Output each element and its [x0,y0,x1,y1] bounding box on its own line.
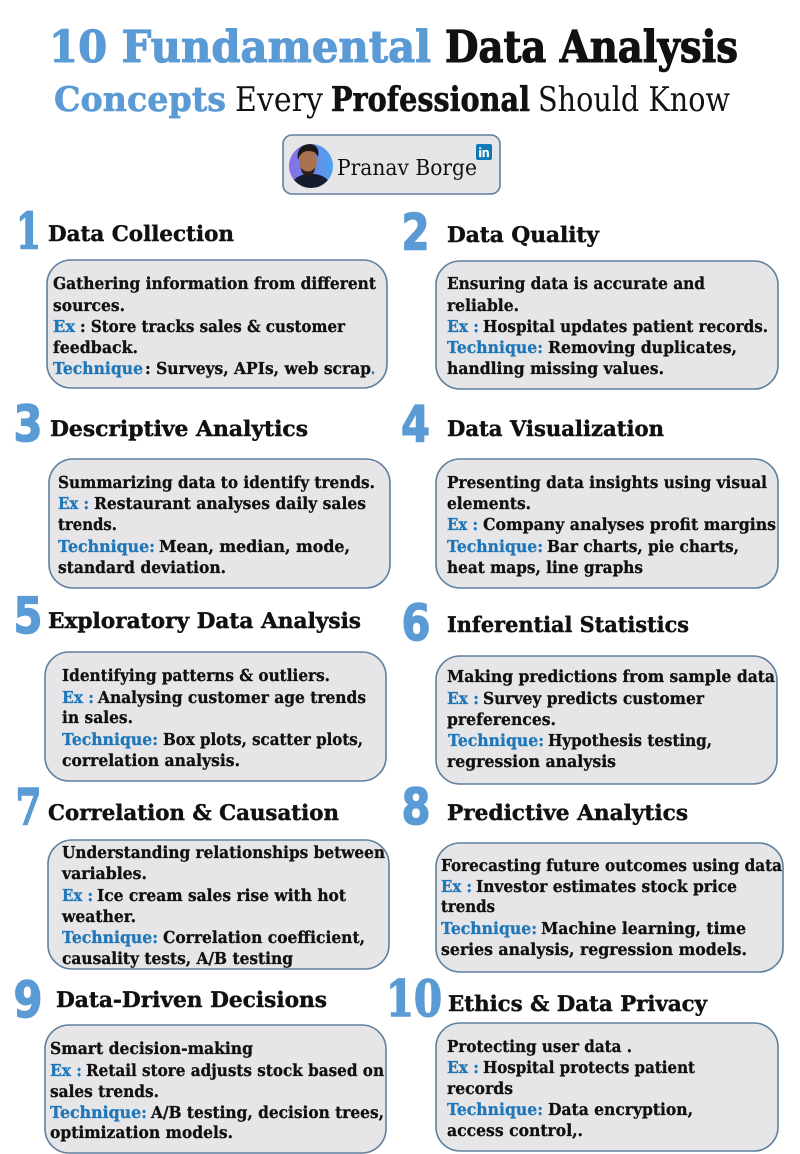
number 1: 1 [16,202,41,260]
icon: author avatar [289,144,333,190]
panel: Data Quality: Removing duplicates, [548,338,737,357]
panel: Ethics & Data Privacy: Hospital protects patient [483,1058,695,1077]
heading: Data Quality [447,223,599,248]
panel: Ethics & Data Privacy: Ex : [447,1058,479,1077]
panel: Data Collection: : Store tracks sales & customer [80,317,345,336]
panel: Data Visualization: Ex : [447,515,478,534]
panel: Predictive Analytics: Investor estimates stock price [476,877,737,896]
author name: Pranav Borge [337,156,477,181]
panel: Inferential Statistics: preferences. [447,710,556,729]
number 2: 2 [402,204,430,262]
heading: Data-Driven Decisions [56,988,327,1013]
panel: Predictive Analytics: Forecasting future outcomes using data [441,856,782,875]
panel: Correlation & Causation: Understanding relationships between [62,843,385,862]
panel: Descriptive Analytics: Ex : [58,494,89,513]
panel: Data-Driven Decisions: Smart decision-making [50,1039,253,1058]
panel: Data Collection [47,260,387,388]
panel: Data Visualization: Presenting data insights using visual [447,473,767,492]
section 8: Predictive Analytics [402,778,783,972]
panel: Data Collection: feedback. [53,338,138,357]
panel: Descriptive Analytics: Mean, median, mode, [159,537,350,556]
panel: Descriptive Analytics: Technique: [58,537,155,556]
panel: Predictive Analytics: series analysis, regression models. [441,940,747,959]
panel: Correlation & Causation [48,840,389,969]
panel: Ethics & Data Privacy: Protecting user data . [447,1037,632,1056]
panel: Correlation & Causation: Technique: [62,928,158,947]
panel: Data Quality: Ex : [447,317,479,336]
section 7: Correlation & Causation [16,778,389,969]
title: Data Analysis [445,22,738,73]
panel: Descriptive Analytics [49,459,390,588]
panel: Data-Driven Decisions: A/B testing, decision trees, [150,1103,384,1122]
panel: Correlation & Causation: causality tests, A/B testing [62,949,293,968]
panel: Exploratory Data Analysis: Technique: [62,730,158,749]
panel: Data Visualization: Bar charts, pie charts, [547,537,739,556]
panel: Descriptive Analytics: standard deviation. [58,558,226,577]
panel: Data-Driven Decisions: Ex : [50,1061,82,1080]
panel: Data Visualization: Technique: [447,537,543,556]
section 1: Data Collection [16,202,387,388]
panel: Correlation & Causation: weather. [61,907,136,926]
panel: Correlation & Causation: Ex : [62,886,93,905]
section 6: Inferential Statistics [402,594,777,784]
number 4: 4 [401,396,430,454]
panel: Data-Driven Decisions [45,1025,386,1153]
panel: Predictive Analytics: Ex : [441,877,472,896]
panel: Inferential Statistics: Making predictions from sample data [447,667,775,686]
title: 10 Fundamental [49,22,431,73]
number 9: 9 [14,971,42,1029]
heading: Descriptive Analytics [50,417,308,442]
number 3: 3 [14,395,42,453]
section 5: Exploratory Data Analysis [14,587,386,781]
heading: Data Collection [48,222,234,247]
heading: Exploratory Data Analysis [48,609,361,634]
panel: Ethics & Data Privacy: Technique: [447,1100,543,1119]
heading: Ethics & Data Privacy [448,992,707,1017]
panel: Data Visualization: Company analyses profit margins [483,515,776,534]
panel: Data Visualization [436,459,778,588]
panel: Data Visualization: elements. [447,494,531,513]
number 6: 6 [402,594,430,652]
panel: Data Collection: sources. [53,296,125,315]
panel: Data Collection: Ex [53,317,75,336]
panel: Predictive Analytics: Technique: [441,919,537,938]
panel: Inferential Statistics: Technique: [448,731,544,750]
panel: Exploratory Data Analysis: Ex : [62,688,94,707]
panel: Descriptive Analytics: Restaurant analyses daily sales [94,494,366,513]
panel: Data Quality: Ensuring data is accurate and [447,274,705,293]
panel: Data Quality: handling missing values. [447,359,664,378]
section 3: Descriptive Analytics [14,395,390,588]
panel: Exploratory Data Analysis: Identifying patterns & outliers. [62,666,330,685]
panel: Correlation & Causation: variables. [61,864,147,883]
icon: LinkedIn: in [478,145,490,160]
panel: Data Quality: Technique: [447,338,543,357]
section 10: Ethics & Data Privacy [386,969,778,1151]
panel: Correlation & Causation: Ice cream sales rise with hot [97,886,346,905]
panel: Exploratory Data Analysis [45,652,386,781]
number 7: 7 [16,778,42,836]
panel: Inferential Statistics [436,656,777,784]
author badge [283,135,500,194]
section 9: Data-Driven Decisions [14,971,386,1153]
panel: Inferential Statistics: regression analysis [447,752,616,771]
panel: Predictive Analytics: Machine learning, time [541,919,746,938]
panel: Exploratory Data Analysis: correlation analysis. [62,751,240,770]
icon: LinkedIn [476,144,492,160]
heading: Predictive Analytics [447,801,688,826]
panel: Inferential Statistics: Hypothesis testing, [548,731,712,750]
panel: Data Visualization: heat maps, line graphs [447,558,643,577]
panel: Inferential Statistics: Survey predicts customer [483,689,704,708]
panel: Descriptive Analytics: trends. [58,515,117,534]
panel: Descriptive Analytics: Summarizing data to identify trends. [58,473,375,492]
panel: Data Collection: . [371,359,375,378]
panel: Ethics & Data Privacy [436,1023,778,1151]
panel: Data-Driven Decisions: Technique: [50,1103,147,1122]
heading: Data Visualization [447,417,664,442]
title: Concepts [54,80,226,120]
title: Professional [331,80,530,120]
heading: Inferential Statistics [447,613,689,638]
panel: Data Quality [436,261,778,389]
panel: Data-Driven Decisions: sales trends. [50,1082,159,1101]
title: Should Know [538,80,730,120]
panel: Data Quality: reliable. [447,296,519,315]
panel: Predictive Analytics: trends [441,897,495,916]
panel: Data Collection: Gathering information from different [53,274,376,293]
heading: Correlation & Causation [48,801,339,826]
panel: Exploratory Data Analysis: in sales. [62,708,133,727]
panel: Data Collection: : Surveys, APIs, web scrap [145,359,371,378]
panel: Data-Driven Decisions: optimization models. [50,1123,233,1142]
panel: Correlation & Causation: Correlation coefficient, [163,928,365,947]
section 2: Data Quality [402,204,778,389]
panel: Ethics & Data Privacy: access control,. [447,1121,583,1140]
panel: Ethics & Data Privacy: records [447,1079,513,1098]
panel: Data-Driven Decisions: Retail store adjusts stock based on [86,1061,384,1080]
number 5: 5 [14,587,42,645]
panel: Inferential Statistics: Ex : [447,689,479,708]
number 10: 10 [386,969,442,1028]
number 8: 8 [402,778,430,836]
section 4: Data Visualization [401,396,778,588]
panel: Ethics & Data Privacy: Data encryption, [548,1100,693,1119]
panel: Data Quality: Hospital updates patient records. [483,317,768,336]
panel: Predictive Analytics [436,843,783,972]
panel: Exploratory Data Analysis: Analysing customer age trends [97,688,366,707]
title [49,22,738,120]
panel: Data Collection: Technique [53,359,143,378]
panel: Exploratory Data Analysis: Box plots, scatter plots, [163,730,363,749]
title: Every [235,80,324,120]
